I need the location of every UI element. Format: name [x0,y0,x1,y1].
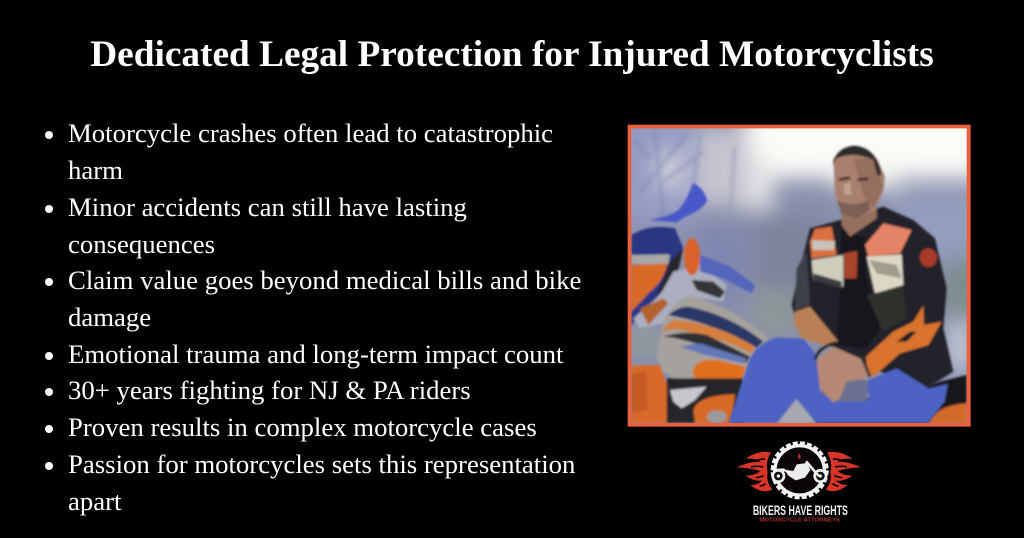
photo frame [628,125,971,427]
jacket body [792,207,953,388]
title: Dedicated Legal Protection for Injured Motorcyclists [90,34,934,75]
bullet list: consequences [68,229,215,259]
neck [842,205,877,237]
hair [833,146,882,176]
bullet list: Emotional trauma and long-term impact count [68,339,563,369]
bullet list: Minor accidents can still have lasting [68,192,467,222]
rider [728,146,953,423]
bullet list: apart [68,486,121,516]
bullet list: Passion for motorcycles sets this representation [68,449,575,479]
icon: gear with motorcycle [771,443,827,497]
fuel tank [656,296,768,388]
icon: left flames [737,452,772,491]
fairing [631,227,683,325]
windscreen [648,183,707,222]
flame sleeve [866,306,942,377]
bullet list: harm [68,155,123,185]
bullet list [45,118,581,516]
bullet list: 30+ years fighting for NJ & PA riders [68,375,471,405]
jacket chest panels [810,227,837,258]
shoulder patch [920,248,937,267]
orange side panel [631,365,679,423]
bullet list: Proven results in complex motorcycle cases [68,412,537,442]
logo tagline: MOTORCYCLE ATTORNEYS [759,518,840,524]
blurred background [631,128,967,423]
handlebar [700,255,755,293]
bullet list: damage [68,302,151,332]
t-shirt [837,230,880,348]
face [833,152,885,218]
logo: Bikers Have Rights [737,441,861,524]
bullet list: Motorcycle crashes often lead to catastrophic [68,118,553,148]
jeans [728,338,948,423]
engine cover [693,394,735,423]
bullet list: Claim value goes beyond medical bills and bike [68,265,581,295]
photo: rider seated on orange motorcycle [628,124,971,427]
turn signal [684,238,700,275]
lower fairing [631,328,663,357]
motorcycle [631,183,967,423]
engine chrome [667,378,743,423]
left sleeve forearm [793,307,838,345]
icon: right flames [826,452,861,491]
hands [817,347,868,402]
seat [807,375,967,423]
frame and dash [633,265,727,328]
